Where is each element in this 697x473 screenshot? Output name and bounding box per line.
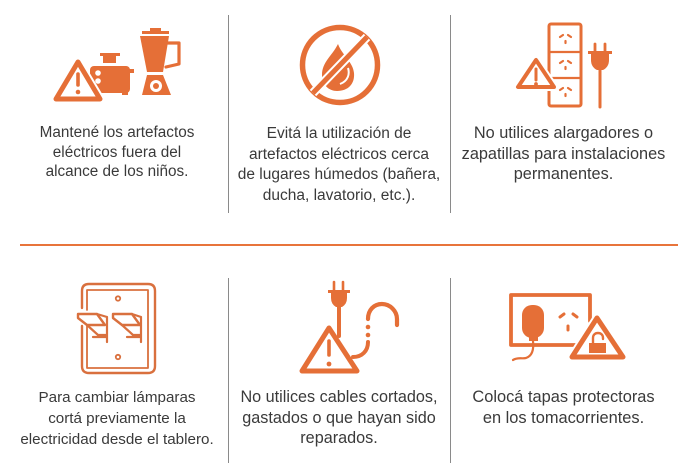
text: changing lamps: Para cambiar lámparas <box>38 389 196 406</box>
text: children <box>40 124 194 180</box>
text: damaged cables: reparados. <box>300 429 378 447</box>
text: humid places: ducha, lavatorio, etc.). <box>263 186 415 204</box>
text: children: alcance de los niños. <box>46 163 188 180</box>
text: extension cords <box>462 124 665 183</box>
text: extension cords: zapatillas para instalaciones <box>462 145 665 163</box>
text: socket covers <box>472 388 655 427</box>
text: extension cords: permanentes. <box>514 165 613 183</box>
text: changing lamps: electricidad desde el tablero. <box>20 431 214 448</box>
text: humid places: Evitá la utilización de <box>267 125 411 142</box>
text: children: Mantené los artefactos <box>40 124 194 141</box>
text: damaged cables: gastados o que hayan sido <box>242 409 436 427</box>
text: socket covers: Colocá tapas protectoras <box>472 388 655 406</box>
text: humid places: de lugares húmedos (bañera, <box>238 166 440 183</box>
text: changing lamps: cortá previamente la <box>48 410 186 427</box>
text: damaged cables <box>240 388 438 447</box>
text: changing lamps <box>20 389 214 448</box>
text: children: eléctricos fuera del <box>53 144 181 161</box>
text: humid places <box>238 125 440 204</box>
text: humid places: artefactos eléctricos cerca <box>249 146 429 162</box>
text: socket covers: en los tomacorrientes. <box>483 409 644 427</box>
text: damaged cables: No utilices cables cortados, <box>240 388 438 406</box>
text: extension cords: No utilices alargadores o <box>474 124 653 142</box>
